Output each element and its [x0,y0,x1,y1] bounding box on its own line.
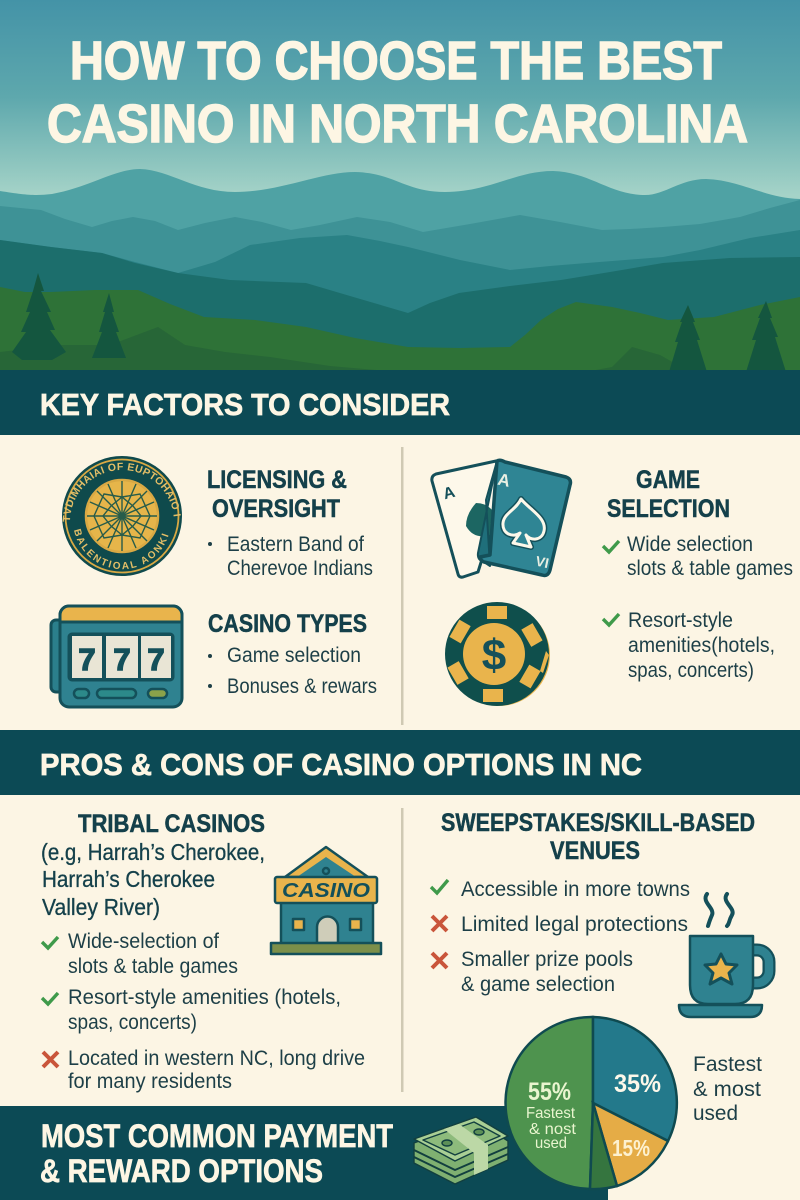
panel: sweepstakes venues [431,809,755,996]
text: game selection [603,466,793,682]
slice: 35 percent [593,1017,677,1141]
icon: coffee mug [679,894,769,1017]
column divider [401,447,404,725]
icon: casino building: CASINO [282,880,370,902]
icon: slot machine [51,606,182,707]
title [47,31,748,154]
icon: playing cards [432,460,570,577]
icon: licensing seal [62,456,182,576]
label: 35 percent: 35% [614,1070,661,1098]
panel: tribal casinos: TRIBAL CASINOS [78,810,265,838]
panel: tribal casinos: Located in western NC, long drive [68,1047,365,1070]
icon: licensing seal: TVDIMHAIAI OF EUPTOHAIO I [62,462,181,522]
icon: playing cards: A [441,484,457,503]
icon: casino chip [445,602,550,706]
icon: slot machine: 7 [78,642,96,677]
panel: tribal casinos: Valley River) [42,894,160,920]
text: licensing and oversight [207,466,373,580]
text: casino types: CASINO TYPES [208,610,367,638]
trees [12,273,786,372]
panel: sweepstakes venues: Limited legal protections [461,913,688,936]
callout: fastest and most used [693,1053,762,1125]
text: game selection: SELECTION [607,495,730,523]
panel: tribal casinos: Wide-selection of [68,930,219,953]
sky [0,0,800,372]
icon: casino building [271,847,381,954]
label: 55 percent: Fastest [526,1105,576,1122]
text: licensing and oversight: LICENSING & [207,466,347,494]
panel: tribal casinos: for many residents [68,1070,232,1093]
text: game selection: amenities(hotels, [628,634,775,657]
panel: tribal casinos: Harrah’s Cherokee [42,866,215,892]
text: licensing and oversight: Cherevoe Indians [227,557,373,580]
callout: fastest and most used: & most [693,1078,761,1101]
icon: slot machine: 7 [113,642,131,677]
icon: slot machine: 7 [147,642,165,677]
heading bar: pros and cons [0,730,800,795]
slice: remainder [590,1103,617,1189]
heading bar: payment options: MOST COMMON PAYMENT [41,1118,393,1154]
title: HOW TO CHOOSE THE BEST [70,31,722,91]
text: licensing and oversight: Eastern Band of [227,533,364,556]
panel: sweepstakes venues: Accessible in more towns [461,878,690,901]
column divider [401,808,404,1092]
heading bar: pros and cons: PROS & CONS OF CASINO OPTIONS IN NC [40,747,642,782]
text: game selection: Resort-style [628,609,733,632]
text: game selection: GAME [636,466,700,494]
panel: mountain hero [0,0,800,372]
text: game selection: Wide selection [627,533,753,556]
text: casino types [208,610,377,698]
panel: key factors [50,447,793,725]
text: game selection: spas, concerts) [628,659,754,682]
heading bar: key factors: KEY FACTORS TO CONSIDER [40,387,450,422]
slice: 55 percent [506,1017,593,1189]
icon: playing cards: A [496,470,512,491]
panel: pros and cons [41,808,769,1093]
label: 55 percent: & nost [529,1121,577,1138]
panel: tribal casinos [41,810,365,1093]
text: casino types: Game selection [227,644,361,667]
heading bar: payment options: & REWARD OPTIONS [40,1153,323,1189]
label: 15 percent: 15% [612,1135,650,1161]
label: 55 percent: 55% [528,1078,571,1106]
callout: fastest and most used: Fastest [693,1053,762,1076]
panel: sweepstakes venues: SWEEPSTAKES/SKILL-BASED [441,809,755,837]
text: casino types: Bonuses & rewars [227,675,377,698]
panel: tribal casinos: Resort-style amenities (hotels, [68,986,341,1009]
panel: sweepstakes venues: VENUES [550,837,640,865]
panel: tribal casinos: slots & table games [68,955,238,978]
text: licensing and oversight: OVERSIGHT [212,495,340,523]
label: 55 percent [526,1078,577,1152]
heading bar: payment options [0,1106,608,1200]
panel: tribal casinos: spas, concerts) [68,1011,197,1034]
icon: casino chip: $ [482,631,506,680]
panel: tribal casinos: (e.g, Harrah’s Cherokee, [41,839,265,865]
pie chart [506,1017,677,1189]
mountains [0,169,800,372]
icon: cash stack [414,1117,508,1184]
panel: sweepstakes venues: & game selection [461,973,615,996]
panel: sweepstakes venues: Smaller prize pools [461,948,633,971]
heading bar: key factors [0,370,800,435]
callout: fastest and most used: used [693,1102,738,1125]
slice: 15 percent [593,1103,668,1186]
label: 55 percent: used [535,1135,567,1152]
icon: playing cards: VI [534,553,550,571]
